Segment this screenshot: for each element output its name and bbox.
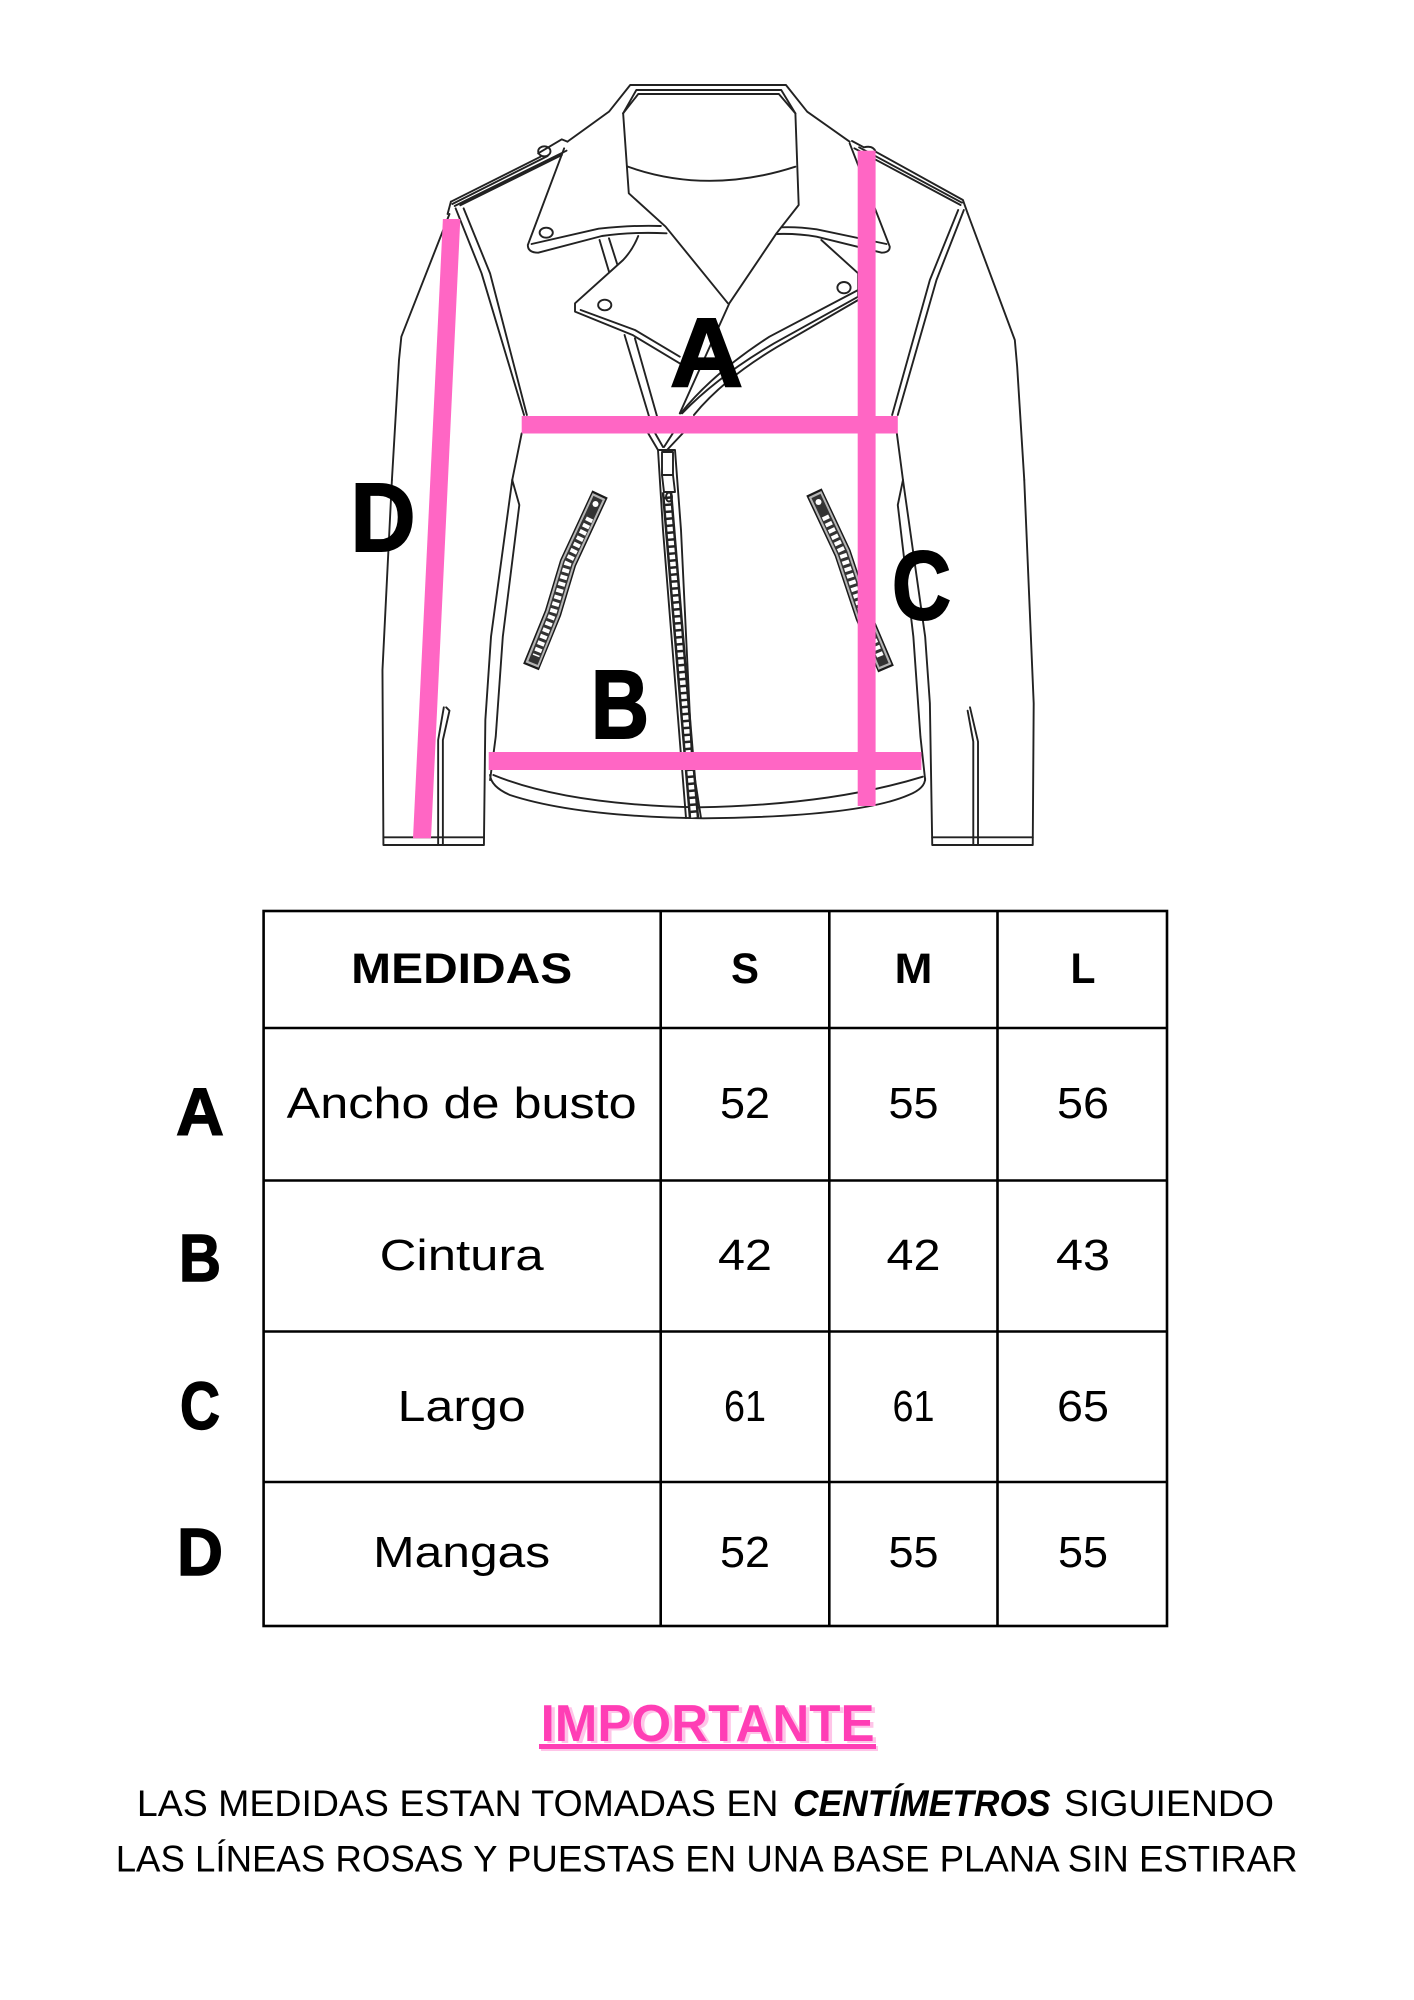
label C on jacket: C xyxy=(892,531,951,640)
note text: CENTÍMETROS xyxy=(793,1783,1051,1824)
pink measure line B xyxy=(489,752,921,770)
row C: largo: 61 xyxy=(724,1382,766,1431)
row A: ancho de busto: 52 xyxy=(720,1079,770,1128)
table header row: MEDIDAS xyxy=(351,945,572,993)
row C: largo: 65 xyxy=(1057,1382,1109,1431)
pink measure line A xyxy=(522,416,898,434)
label D on jacket: D xyxy=(350,463,416,572)
note text: LAS LÍNEAS ROSAS Y PUESTAS EN UNA BASE PLANA SIN ESTIRAR xyxy=(116,1839,1298,1880)
note text: SIGUIENDO xyxy=(1064,1783,1274,1824)
row D: mangas xyxy=(373,1528,1108,1577)
row letters beside table: C xyxy=(180,1369,220,1444)
row B: cintura: 42 xyxy=(886,1231,940,1280)
note text: LAS MEDIDAS ESTAN TOMADAS EN xyxy=(137,1783,778,1824)
row B: cintura: 43 xyxy=(1056,1231,1110,1280)
row C: largo: Largo xyxy=(398,1382,526,1431)
row A: ancho de busto: 55 xyxy=(888,1079,938,1128)
row letters beside table xyxy=(176,1075,224,1590)
table grid xyxy=(264,911,1167,1626)
row B: cintura: Cintura xyxy=(380,1231,544,1280)
row D: mangas: Mangas xyxy=(373,1528,550,1577)
left pocket zipper xyxy=(531,494,600,667)
row D: mangas: 55 xyxy=(1058,1528,1108,1577)
table header row xyxy=(351,945,1096,993)
main zipper with slider xyxy=(648,433,701,818)
table header row: L xyxy=(1070,945,1096,993)
row A: ancho de busto: 56 xyxy=(1057,1079,1109,1128)
row D: mangas: 55 xyxy=(888,1528,938,1577)
note text xyxy=(116,1783,1298,1880)
row letters beside table: B xyxy=(179,1221,221,1296)
heading text: IMPORTANTE xyxy=(541,1695,875,1753)
jacket line drawing xyxy=(382,85,1034,845)
row A: ancho de busto xyxy=(287,1079,1109,1128)
table header row: S xyxy=(731,945,759,993)
label B on jacket: B xyxy=(591,650,649,759)
row C: largo xyxy=(398,1382,1109,1431)
label A on jacket: A xyxy=(670,298,743,407)
jacket upper part xyxy=(392,85,1024,480)
row B: cintura xyxy=(380,1231,1110,1280)
table header row: M xyxy=(894,945,932,993)
size table xyxy=(264,911,1167,1626)
pink measure line D xyxy=(413,219,460,838)
jacket lower part xyxy=(382,480,1034,845)
pink measure line C xyxy=(858,151,876,806)
row letters beside table: A xyxy=(176,1075,224,1150)
row D: mangas: 52 xyxy=(720,1528,770,1577)
heading shadow: IMPORTANTE xyxy=(544,1697,878,1755)
heading: importante xyxy=(539,1695,878,1755)
row A: ancho de busto: Ancho de busto xyxy=(287,1079,637,1128)
right pocket zipper xyxy=(814,492,886,669)
row B: cintura: 42 xyxy=(718,1231,772,1280)
row C: largo: 61 xyxy=(892,1382,934,1431)
row letters beside table: D xyxy=(177,1515,223,1590)
